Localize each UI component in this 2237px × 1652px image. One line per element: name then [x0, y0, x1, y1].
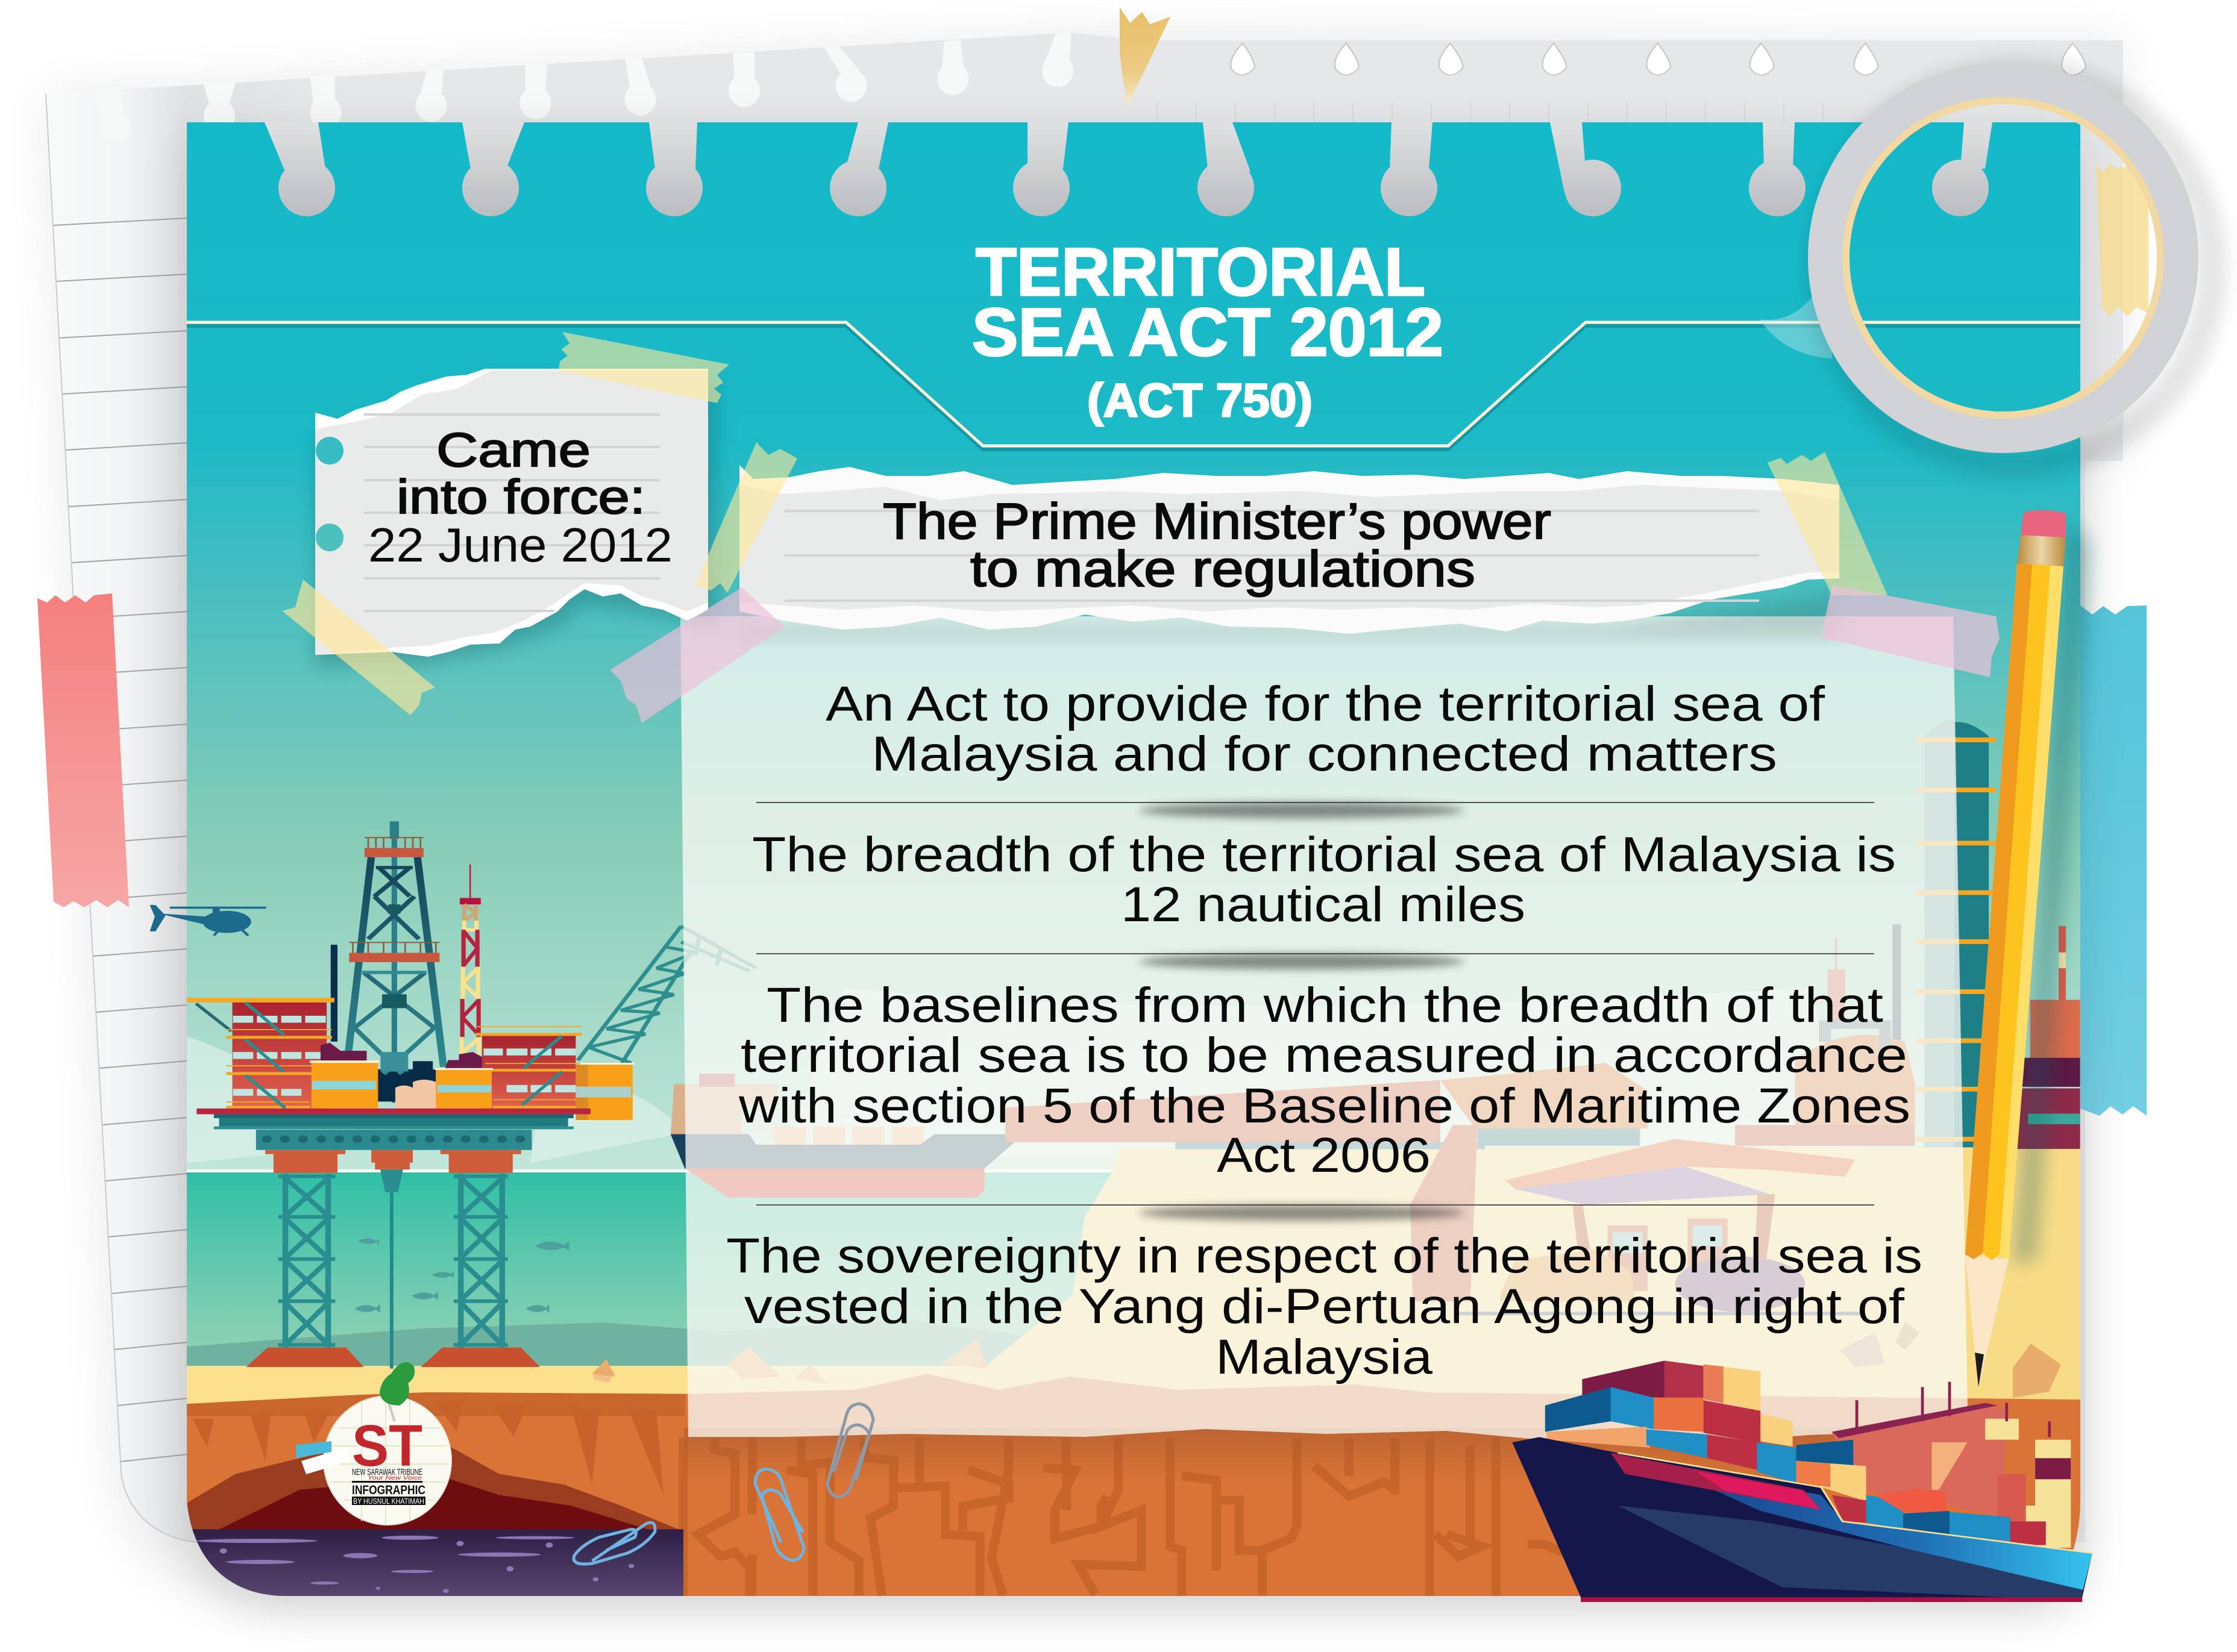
sea rocks — [594, 1364, 615, 1383]
came into force text — [368, 423, 673, 572]
banner text — [883, 493, 1551, 597]
title: TERRITORIAL — [976, 234, 1425, 310]
maroon machinery — [321, 1043, 483, 1068]
beach rock — [1840, 1333, 1885, 1367]
statement 3: baselines — [738, 978, 1910, 1183]
main card with scenery — [187, 122, 2140, 1598]
torn banner: prime minister's power — [739, 465, 1839, 634]
rig leg right — [454, 1174, 508, 1348]
derrick pole — [392, 837, 397, 1103]
title: (ACT 750) — [1087, 374, 1313, 427]
statement 4: sovereignty — [726, 1228, 1922, 1384]
canopy roof — [1505, 1139, 1855, 1189]
header decorative line — [187, 322, 2080, 449]
pencil eraser — [2021, 510, 2066, 537]
statement 3: baselines: with section 5 of the Baseline of Maritime Zones — [738, 1078, 1910, 1133]
punched holes — [316, 437, 344, 465]
pencil shadow — [2013, 518, 2091, 1265]
soil — [187, 1374, 2140, 1596]
statement 3: baselines: The baselines from which the breadth of that — [767, 978, 1883, 1033]
beach rocks — [592, 1340, 988, 1384]
canopy posts — [1573, 1194, 1775, 1309]
stack — [331, 945, 337, 1042]
ship containers — [1582, 1361, 1704, 1399]
soil dark band under panel edge — [684, 1428, 1889, 1482]
washi tape: red left — [37, 593, 129, 907]
statement 2: breadth: The breadth of the territorial sea of Malaysia is — [752, 827, 1896, 882]
came into force text: Came — [436, 423, 591, 477]
paper clips — [574, 1404, 873, 1564]
statement 2: breadth: 12 nautical miles — [1121, 877, 1525, 932]
statement 1: purpose of act: Malaysia and for connected matters — [871, 727, 1777, 781]
hull blue band — [1661, 1466, 2092, 1590]
rig pontoon beam — [256, 1130, 532, 1150]
green push pin — [380, 1362, 415, 1421]
ship funnels — [2035, 1440, 2071, 1548]
paper binding holes, left tilted part — [90, 32, 1073, 143]
panel text and dividers — [726, 677, 1922, 1384]
rig feet — [246, 1348, 540, 1367]
yellow tape right of banner — [1768, 452, 1887, 595]
background gradient — [187, 122, 2080, 1174]
rig deck — [196, 1109, 591, 1129]
purple boulder — [1675, 1256, 1805, 1312]
came into force text: 22 June 2012 — [368, 518, 673, 572]
palm shrub — [1895, 1322, 1920, 1350]
derrick spire — [390, 821, 399, 839]
parked car — [1500, 1250, 1635, 1301]
fuel pumps — [1608, 1218, 1728, 1291]
sea floor hills — [187, 1319, 1085, 1374]
left module — [187, 998, 334, 1109]
hull mid shade — [1618, 1506, 2083, 1600]
statement 4: sovereignty: The sovereignty in respect of the territorial sea is — [726, 1228, 1922, 1283]
background train, refinery and gas station — [1005, 924, 1920, 1367]
paper clip on oil — [574, 1522, 655, 1564]
forecourt line — [1455, 1312, 1860, 1315]
yellow tape on strip — [2096, 163, 2148, 316]
statement 1: purpose of act — [826, 677, 1825, 781]
paper binding holes, right straight part — [1231, 43, 2086, 75]
locomotive — [1440, 1063, 1648, 1128]
storage tanks — [395, 1080, 436, 1109]
pencil body — [1965, 563, 2063, 1260]
right module — [476, 1027, 582, 1109]
statement 4: sovereignty: vested in the Yang di-Pertuan Agong in right of — [744, 1279, 1904, 1334]
refinery tower — [1916, 718, 2080, 1149]
tape roll magnifier — [1826, 81, 2180, 435]
torn note: came into force — [315, 369, 708, 657]
gas station post — [1410, 1125, 1478, 1301]
top platform — [365, 837, 424, 857]
refinery chimney — [1892, 924, 1901, 1042]
sea — [187, 1171, 1151, 1370]
card punched tabs — [265, 122, 1992, 216]
background tanker ship — [671, 1074, 1024, 1197]
ship hull — [1512, 1437, 2092, 1600]
logo rule — [352, 1481, 422, 1483]
ship bridge — [1832, 1403, 2007, 1516]
pink tape right — [1821, 585, 2000, 677]
hull keel — [1581, 1597, 2082, 1602]
yellow tape top of note — [559, 332, 729, 403]
logo tribune name: NEW SARAWAK TRIBUNE — [352, 1467, 422, 1477]
yellow tape bottom of note — [282, 580, 435, 715]
rig riser — [390, 1192, 393, 1369]
paper clip grey — [827, 1404, 873, 1497]
sand dune and shore — [988, 1147, 2080, 1410]
yellow tape left of banner — [695, 442, 797, 593]
oil rig legs — [246, 1169, 540, 1369]
chimney — [2059, 926, 2066, 1042]
banner text: to make regulations — [970, 540, 1475, 597]
washi tape: blue right — [2080, 605, 2147, 1116]
main teal card shadow — [187, 134, 2080, 1608]
paper clip blue — [755, 1469, 804, 1560]
right container — [576, 1063, 634, 1120]
divider 3 — [756, 1204, 1874, 1221]
statement 1: purpose of act: An Act to provide for the territorial sea of — [826, 677, 1825, 731]
pencil ferrule — [2017, 535, 2066, 566]
refinery pipes — [1825, 1025, 1885, 1049]
oil reservoir — [187, 1529, 683, 1598]
oil rig upper structure — [187, 821, 634, 1173]
divider 1 — [756, 802, 1874, 818]
logo infographic: INFOGRAPHIC — [352, 1483, 425, 1497]
fish — [354, 1238, 569, 1313]
soil wedges left — [193, 1400, 664, 1495]
tank wagons — [1005, 1080, 1440, 1142]
sand — [187, 1366, 2080, 1420]
logo stamp — [296, 1396, 451, 1525]
oil cave — [187, 1442, 685, 1598]
horizon line — [187, 1169, 1151, 1172]
derrick dark base — [377, 1061, 436, 1101]
hull stripe — [1611, 1453, 1821, 1510]
translucent content panel — [680, 616, 1968, 1441]
roll shadow — [1820, 72, 2212, 464]
canopy underside — [1515, 1166, 1770, 1204]
rig leg left — [278, 1174, 335, 1348]
divider 2 — [756, 953, 1874, 969]
rig column tops — [265, 1150, 521, 1173]
orange containers — [310, 1060, 493, 1109]
statement 4: sovereignty: Malaysia — [1216, 1330, 1432, 1384]
gold tape top — [1120, 7, 1170, 107]
pencil tip — [1965, 1256, 2009, 1387]
flare tower — [460, 865, 481, 1054]
pink tape left — [610, 587, 785, 723]
helicopter — [150, 905, 266, 936]
soil crack pattern — [683, 1438, 1567, 1595]
derrick legs and bracing — [347, 857, 444, 1074]
flare stack — [1827, 938, 1845, 1021]
title: SEA ACT 2012 — [972, 295, 1443, 370]
mid platform — [349, 942, 439, 962]
beach rocks right — [2013, 1344, 2061, 1398]
note shadow — [315, 380, 717, 667]
plant building — [1735, 1125, 1915, 1146]
statement 3: baselines: Act 2006 — [1217, 1128, 1431, 1183]
ship masts — [1857, 1381, 2050, 1437]
title — [972, 234, 1443, 427]
logo author bar: BY HUSNUL KHATIMAH — [353, 1497, 424, 1506]
pencil — [1965, 510, 2066, 1387]
water streaks behind the rig — [187, 988, 1868, 1163]
logo tags — [296, 1441, 331, 1458]
torn banner shadow — [739, 593, 1839, 639]
translucent roll curl — [1760, 259, 1832, 358]
refinery dome — [1795, 1034, 1915, 1146]
logo tagline: Your New Voice — [368, 1475, 422, 1481]
statement 3: baselines: territorial sea is to be measured in accordance — [741, 1028, 1907, 1083]
masking tapes — [282, 7, 2000, 723]
container ship — [1512, 1361, 2092, 1602]
came into force text: into force: — [397, 470, 645, 524]
rig centre nozzle — [380, 1169, 403, 1192]
logo ST: ST — [352, 1413, 422, 1478]
statement 2: breadth — [752, 827, 1896, 932]
banner text: The Prime Minister’s power — [883, 493, 1551, 549]
factory block — [2017, 1088, 2080, 1149]
crane on the rig — [578, 926, 756, 1063]
derrick braces nodes — [382, 904, 407, 1008]
